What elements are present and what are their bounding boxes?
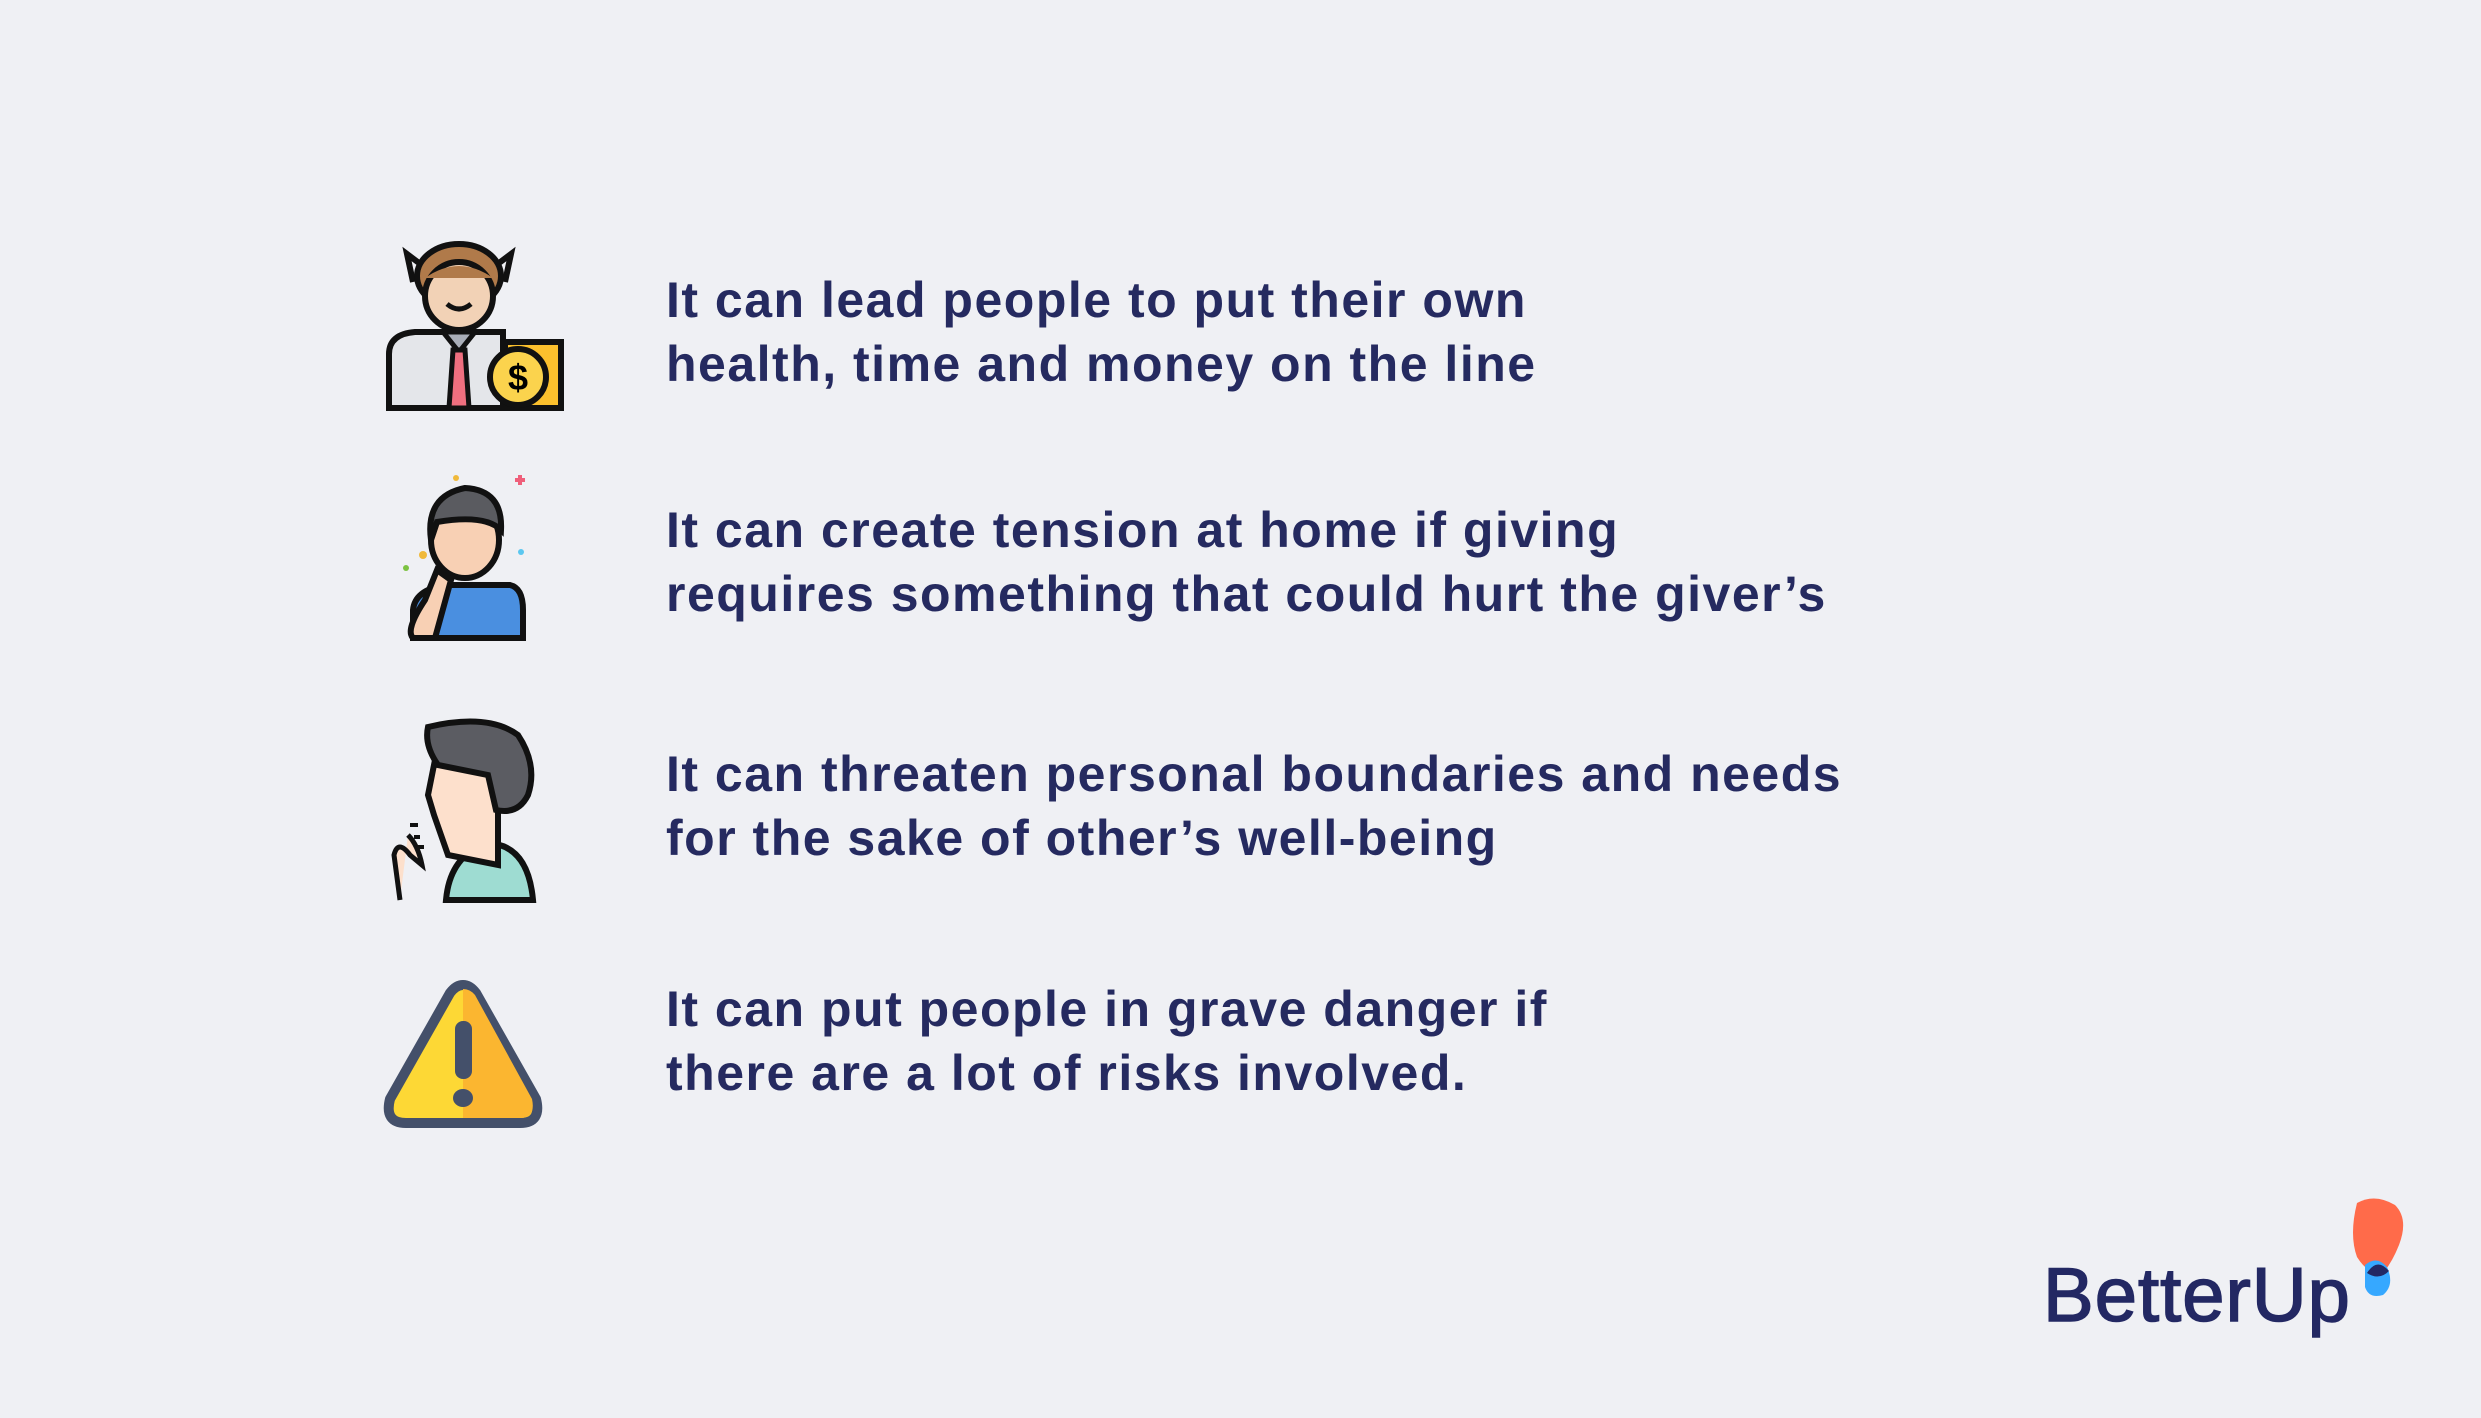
text: row 2: requires something that could hurt the giver’s [666,566,1827,622]
text: row 3: It can threaten personal boundaries and needs [666,746,1842,802]
text: row 2: It can create tension at home if giving [666,502,1619,558]
text: row 3 [666,746,1842,866]
text: row 4: It can put people in grave danger if [666,981,1548,1037]
logo: BetterUp [2043,1198,2404,1338]
text: row 1: It can lead people to put their own [666,272,1527,328]
text: row 2 [666,502,1827,622]
logo: BetterUp: BetterUp [2043,1253,2351,1338]
icon: coughing man [392,718,536,903]
text: row 1: health, time and money on the line [666,336,1537,392]
text: row 4: there are a lot of risks involved. [666,1045,1467,1101]
icon: warning triangle [384,980,542,1128]
icon: businessman with coins [386,241,564,411]
text: row 1 [666,272,1537,392]
text: row 4 [666,981,1548,1101]
icon: tired man [403,475,526,641]
icon: businessman with coins: $ [508,357,528,398]
text: row 3: for the sake of other’s well-being [666,810,1498,866]
